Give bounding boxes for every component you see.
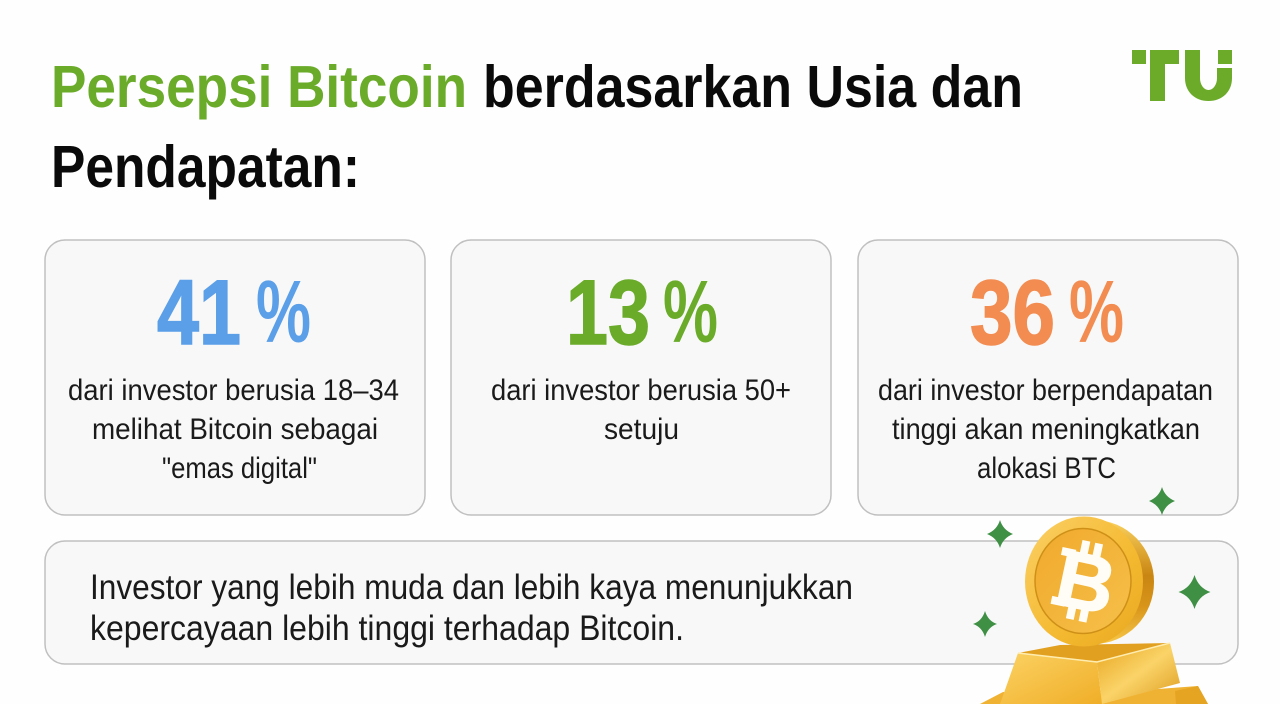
description: young investors xyxy=(68,374,399,485)
icon: bitcoin coin xyxy=(1025,516,1154,646)
title: Persepsi Bitcoin xyxy=(51,54,467,120)
description: older investors xyxy=(491,374,791,446)
description: high income investors xyxy=(878,374,1213,485)
stat: 41%: % xyxy=(256,262,311,361)
description: young investors: dari investor berusia 18–34 xyxy=(68,374,399,407)
bitcoin symbol: B xyxy=(1048,533,1123,632)
description: high income investors: alokasi BTC xyxy=(977,452,1116,485)
description: high income investors: tinggi akan meningkatkan xyxy=(892,413,1200,446)
conclusion text: kepercayaan lebih tinggi terhadap Bitcoin. xyxy=(90,609,684,648)
conclusion text: Investor yang lebih muda dan lebih kaya menunjukkan xyxy=(90,568,853,607)
description: older investors: setuju xyxy=(604,413,679,446)
stat: 36%: 36 xyxy=(970,262,1055,364)
title xyxy=(51,54,1023,200)
stat: 36%: % xyxy=(1069,262,1124,361)
stat: 13% xyxy=(566,262,718,364)
panel: 13 percent xyxy=(451,240,831,515)
panel: 41 percent xyxy=(45,240,425,515)
description: young investors: melihat Bitcoin sebagai xyxy=(92,413,378,446)
stat: 41%: 41 xyxy=(157,262,241,364)
icon: sparkles xyxy=(973,487,1210,637)
conclusion text xyxy=(90,568,853,648)
icon: gold bars xyxy=(980,643,1208,704)
logo: TU xyxy=(1132,50,1232,101)
stat: 36% xyxy=(970,262,1124,364)
description: high income investors: dari investor berpendapatan xyxy=(878,374,1213,407)
stat: 13%: 13 xyxy=(566,262,650,364)
stat: 41% xyxy=(157,262,311,364)
panel: conclusion xyxy=(45,541,1238,664)
stat: 13%: % xyxy=(663,262,718,361)
title: Pendapatan: xyxy=(51,134,360,200)
panel: 36 percent xyxy=(858,240,1238,515)
title: berdasarkan Usia dan xyxy=(483,54,1023,120)
description: young investors: "emas digital" xyxy=(162,452,317,485)
description: older investors: dari investor berusia 50+ xyxy=(491,374,791,407)
